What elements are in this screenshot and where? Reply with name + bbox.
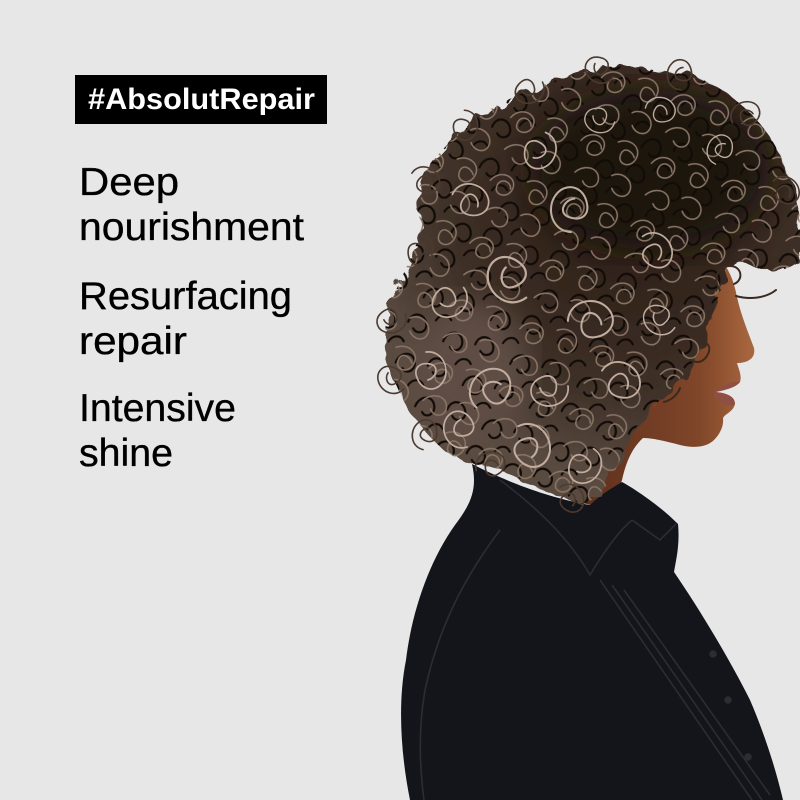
jacket <box>401 464 783 800</box>
frizz curls along the edge <box>372 52 800 517</box>
benefit: resurfacing repair <box>79 275 292 363</box>
benefit: deep nourishment: Deep <box>79 161 179 204</box>
hashtag label <box>75 75 327 124</box>
curly hair <box>370 50 800 520</box>
highlighted curls <box>416 93 737 490</box>
benefit: resurfacing repair: Resurfacing <box>79 275 292 318</box>
jacket collar and pleats <box>420 480 770 800</box>
benefit: intensive shine <box>79 387 236 475</box>
benefit: deep nourishment <box>79 161 304 249</box>
benefit: intensive shine: Intensive <box>79 387 236 430</box>
benefit: resurfacing repair: repair <box>79 320 187 363</box>
lips <box>714 382 740 405</box>
benefit: deep nourishment: nourishment <box>79 206 304 249</box>
stray curls at the temple <box>664 266 776 402</box>
face and neck <box>570 250 754 510</box>
hashtag label: #AbsolutRepair <box>88 83 315 116</box>
portrait: woman in profile <box>370 50 800 800</box>
benefit: intensive shine: shine <box>79 432 173 475</box>
